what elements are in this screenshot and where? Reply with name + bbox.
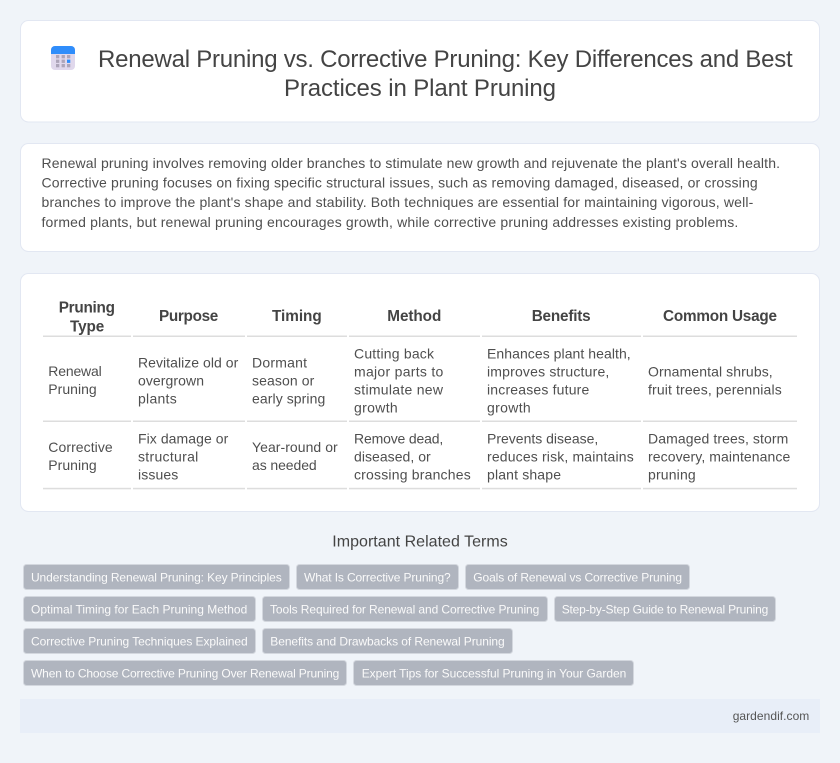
table row: renewal pruning: stimulate new — [354, 381, 444, 397]
table row: renewal pruning: early spring — [252, 390, 325, 406]
panel: related term tags — [24, 564, 776, 686]
text block: summary: Corrective pruning focuses on fixing specific structural issues, such as removing damaged, diseased, or crossing — [42, 175, 758, 191]
table row: corrective pruning: diseased, or — [354, 448, 431, 464]
table row: corrective pruning — [48, 430, 791, 482]
tag: When to Choose Corrective Pruning Over Renewal Pruning — [31, 666, 339, 680]
table row: corrective pruning: recovery, maintenance — [648, 448, 791, 464]
tag: Step-by-Step Guide to Renewal Pruning — [562, 602, 768, 616]
tag — [296, 564, 458, 590]
footer — [20, 699, 820, 733]
table row: corrective pruning: Pruning — [48, 457, 97, 473]
table row: corrective pruning: as needed — [252, 457, 317, 473]
table row: renewal pruning: major parts to — [354, 363, 444, 379]
table row: renewal pruning: fruit trees, perennials — [648, 381, 782, 397]
table row: renewal pruning — [48, 345, 782, 415]
tag — [24, 628, 256, 654]
table row: renewal pruning: Renewal — [48, 363, 102, 379]
table row: corrective pruning: pruning — [648, 466, 696, 482]
table row: corrective pruning: crossing branches — [354, 466, 471, 482]
footer: gardendif.com — [733, 709, 809, 723]
table row: renewal pruning: overgrown — [138, 372, 204, 388]
table row: corrective pruning: Corrective — [48, 439, 113, 455]
table row: corrective pruning: issues — [138, 466, 178, 482]
table header row: Pruning — [59, 300, 115, 316]
text block: summary — [42, 155, 780, 230]
table row: renewal pruning: Revitalize old or — [138, 354, 239, 370]
table row: renewal pruning: Pruning — [48, 381, 97, 397]
tag — [24, 564, 290, 590]
title: Practices in Plant Pruning — [284, 75, 556, 102]
tag — [24, 596, 256, 622]
text block: summary: branches to improve the plant's shape and stability. Both techniques are essential for maintaining vigorous, well- — [42, 194, 754, 210]
tag — [24, 660, 346, 686]
tag: Goals of Renewal vs Corrective Pruning — [473, 570, 682, 584]
table header row: Method — [387, 308, 441, 325]
tag — [466, 564, 690, 590]
title: Renewal Pruning vs. Corrective Pruning: Key Differences and Best — [98, 46, 793, 73]
tag: Tools Required for Renewal and Corrective Pruning — [270, 602, 539, 616]
tag: What Is Corrective Pruning? — [304, 570, 451, 584]
heading: important related terms: Important Related Terms — [332, 534, 508, 551]
table row: renewal pruning: growth — [487, 399, 531, 415]
icon: calendar — [51, 46, 75, 70]
table header row: Timing — [272, 308, 322, 325]
table row: renewal pruning: growth — [354, 399, 398, 415]
table row: corrective pruning: reduces risk, maintains — [487, 448, 634, 464]
table row: renewal pruning: Dormant — [252, 354, 307, 370]
table row: corrective pruning: Fix damage or — [138, 430, 229, 446]
table header row: Type — [70, 318, 104, 336]
table header row: Common Usage — [663, 308, 777, 325]
table row: corrective pruning: structural — [138, 448, 198, 464]
table row: renewal pruning: increases future — [487, 381, 590, 397]
table row: corrective pruning: Prevents disease, — [487, 430, 598, 446]
title — [98, 46, 793, 102]
tag: Benefits and Drawbacks of Renewal Pruning — [270, 634, 505, 648]
table row: corrective pruning: plant shape — [487, 466, 561, 482]
table row: renewal pruning: season or — [252, 372, 315, 388]
table header row — [59, 300, 777, 336]
tag — [262, 628, 512, 654]
tag — [354, 660, 634, 686]
table row: renewal pruning: Cutting back — [354, 345, 435, 361]
table header row: Benefits — [532, 308, 591, 325]
table row: corrective pruning: Year-round or — [252, 439, 338, 455]
tag: Understanding Renewal Pruning: Key Principles — [31, 570, 282, 584]
table row: corrective pruning: Damaged trees, storm — [648, 430, 788, 446]
table row: renewal pruning: Ornamental shrubs, — [648, 363, 773, 379]
table header row: Purpose — [159, 308, 218, 325]
text block: summary: Renewal pruning involves removing older branches to stimulate new growth and rejuvenate the plant's overall health. — [42, 155, 780, 171]
tag — [262, 596, 548, 622]
tag — [554, 596, 776, 622]
panel: title header — [20, 20, 820, 122]
table row: renewal pruning: improves structure, — [487, 363, 609, 379]
table row: corrective pruning: Remove dead, — [354, 430, 443, 446]
tag: Corrective Pruning Techniques Explained — [31, 634, 248, 648]
table row: renewal pruning: plants — [138, 390, 177, 406]
table row: renewal pruning: Enhances plant health, — [487, 345, 631, 361]
panel: comparison table — [20, 274, 820, 512]
panel: summary paragraph — [20, 144, 820, 252]
text block: summary: formed plants, but renewal pruning encourages growth, while corrective pruning addresses existing problems. — [42, 214, 738, 230]
tag: Optimal Timing for Each Pruning Method — [31, 602, 247, 616]
tag: Expert Tips for Successful Pruning in Your Garden — [362, 666, 626, 680]
